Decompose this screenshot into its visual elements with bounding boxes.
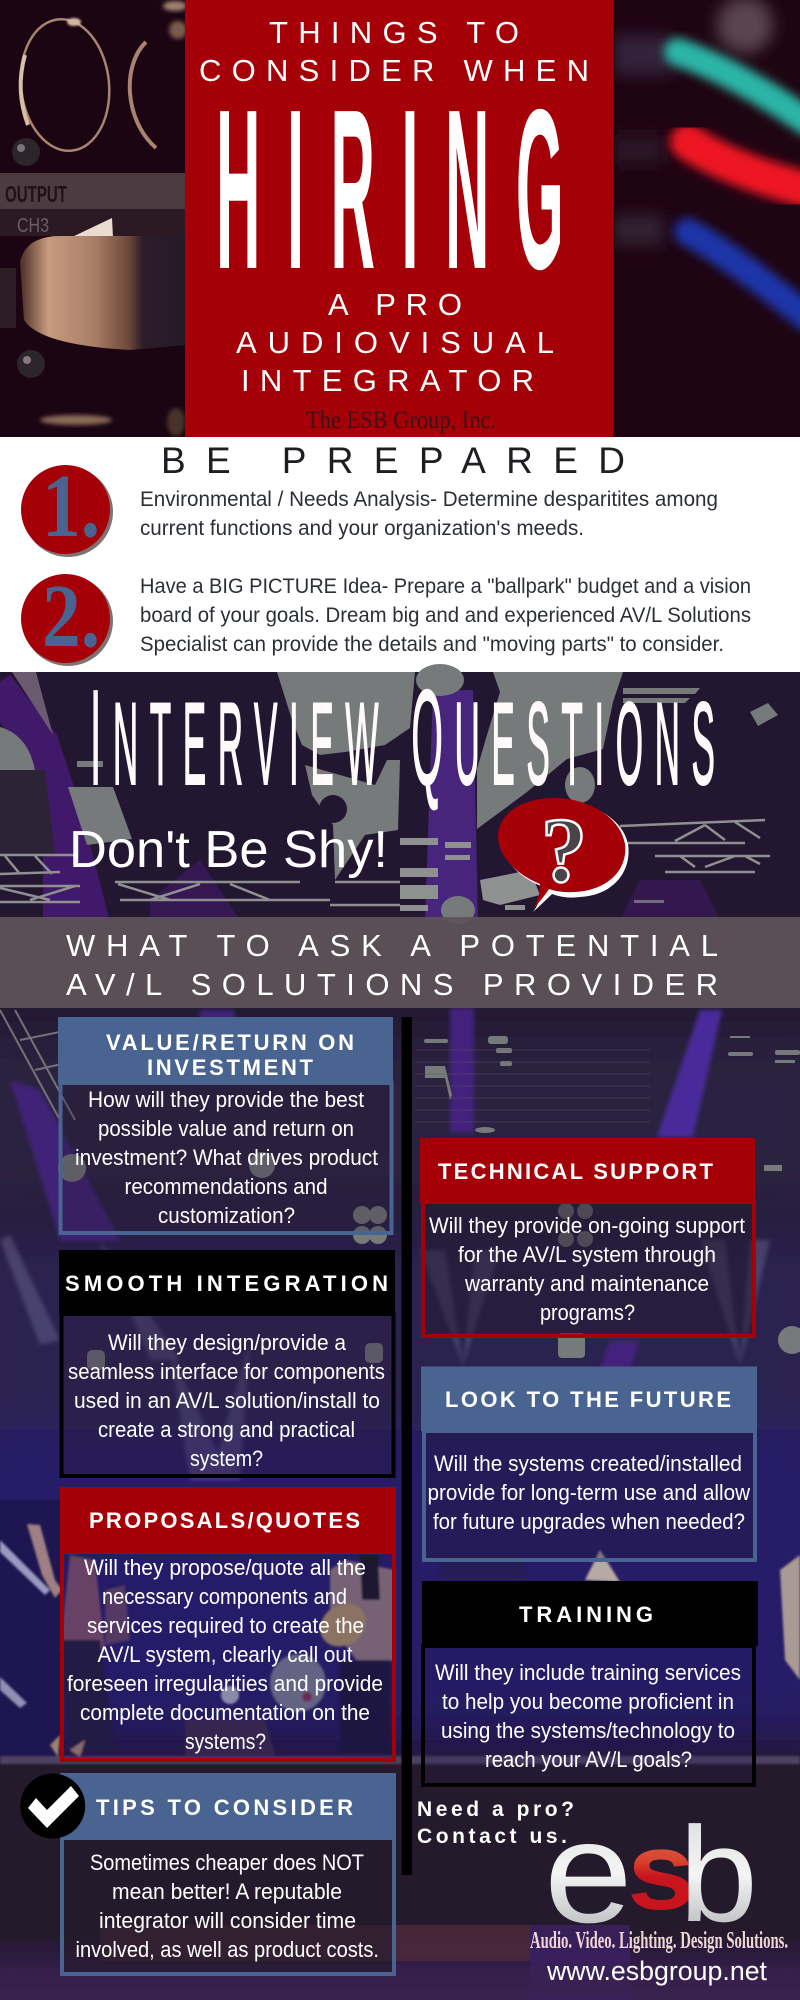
card heading: TECHNICAL SUPPORT — [438, 1159, 714, 1184]
card text — [68, 1330, 385, 1471]
banner line two: AV/L SOLUTIONS PROVIDER — [66, 967, 718, 1002]
card heading: SMOOTH INTEGRATION — [65, 1271, 388, 1296]
title word: hiring: HIRING — [216, 63, 590, 317]
icon: number two: 2. — [42, 567, 100, 666]
card: tips to consider — [20, 1773, 396, 1974]
card text: to help you become proficient in — [442, 1689, 734, 1714]
icon: question speech bubble — [498, 798, 629, 912]
photo: blurred coloured cables — [613, 0, 800, 437]
text: step two: board of your goals. Dream big and and experienced AV/L Solutions — [140, 604, 751, 627]
icon: number one — [21, 457, 113, 557]
card text: foreseen irregularities and provide — [67, 1671, 383, 1696]
card text — [67, 1555, 383, 1754]
card heading: PROPOSALS/QUOTES — [89, 1508, 360, 1533]
top stage: grey light shapes — [0, 664, 778, 924]
card text: investment? What drives product — [75, 1145, 378, 1170]
website: www.esbgroup.net — [546, 1956, 767, 1986]
card text — [429, 1213, 745, 1325]
light cones — [0, 1235, 770, 1480]
title line: audiovisual: AUDIOVISUAL — [236, 325, 554, 360]
card text: for the AV/L system through — [458, 1242, 716, 1267]
card text: Will they provide on-going support — [429, 1213, 745, 1238]
banner line one: WHAT TO ASK A POTENTIAL — [66, 928, 718, 963]
timeline divider bar — [402, 1017, 412, 1875]
text: step two: Specialist can provide the details and "moving parts" to consider. — [140, 633, 724, 656]
icon: check mark — [20, 1774, 85, 1838]
card text: Will they design/provide a — [108, 1330, 347, 1355]
card text: recommendations and — [124, 1174, 328, 1199]
top stage: truss — [0, 820, 770, 905]
banner: what to ask — [0, 917, 800, 1008]
photo: audio equipment: OUTPUT — [5, 181, 67, 207]
call to action: Contact us. — [417, 1825, 567, 1848]
card text: for future upgrades when needed? — [433, 1509, 745, 1534]
logo: esb — [544, 1792, 758, 1953]
card text: seamless interface for components — [68, 1359, 385, 1384]
card heading: LOOK TO THE FUTURE — [445, 1387, 731, 1412]
card text — [76, 1850, 379, 1962]
heading: be prepared: BE PREPARED — [161, 440, 625, 481]
icon: number two — [21, 567, 113, 666]
card heading: VALUE/RETURN ON — [106, 1030, 354, 1055]
heading: interview questions: INTERVIEW QUESTIONS — [90, 663, 727, 814]
card text: Will they propose/quote all the — [84, 1555, 366, 1580]
card: proposals / quotes — [60, 1487, 396, 1760]
heading: don't be shy: Don't Be Shy! — [69, 821, 388, 879]
card text: Sometimes cheaper does NOT — [90, 1850, 364, 1875]
card heading: TRAINING — [519, 1602, 653, 1627]
text: step one: current functions and your organization's meeds. — [140, 517, 584, 540]
logo: esb: b — [679, 1800, 758, 1950]
icon: number one: 1. — [42, 457, 100, 556]
card text: programs? — [540, 1300, 635, 1325]
card text: involved, as well as product costs. — [76, 1937, 379, 1962]
text: step one — [140, 488, 718, 540]
card text: system? — [190, 1446, 263, 1471]
title line: consider when: CONSIDER WHEN — [199, 53, 589, 88]
card text: mean better! A reputable — [112, 1879, 342, 1904]
card text: provide for long-term use and allow — [428, 1480, 750, 1505]
card heading — [106, 1030, 354, 1080]
panel: be prepared — [0, 437, 800, 672]
card text: reach your AV/L goals? — [485, 1747, 692, 1772]
card heading: TIPS TO CONSIDER — [96, 1795, 353, 1820]
card text: integrator will consider time — [99, 1908, 356, 1933]
card text: possible value and return on — [98, 1116, 354, 1141]
stage performers — [0, 1524, 800, 1764]
card text: necessary components and — [102, 1584, 347, 1609]
title line: things to: THINGS TO — [269, 15, 519, 50]
logo: esb: s — [627, 1809, 696, 1933]
call to action: Need a pro? — [417, 1798, 574, 1821]
card text: create a strong and practical — [98, 1417, 355, 1442]
card text: Will they include training services — [435, 1660, 741, 1685]
title line: integrator: INTEGRATOR — [241, 363, 534, 398]
logo: esb: e — [544, 1792, 633, 1953]
card heading: INVESTMENT — [147, 1055, 314, 1080]
card text: services required to create the — [87, 1613, 364, 1638]
card: look to the future — [421, 1366, 757, 1560]
card: value / return on investment — [58, 1017, 393, 1233]
card: technical support — [420, 1138, 755, 1336]
card: training — [422, 1581, 758, 1785]
card text: used in an AV/L solution/install to — [74, 1388, 380, 1413]
card text: customization? — [158, 1203, 295, 1228]
panel: title — [185, 0, 613, 437]
title line: a pro: A PRO — [328, 287, 462, 322]
card text: Will the systems created/installed — [434, 1451, 742, 1476]
card text: complete documentation on the — [80, 1700, 370, 1725]
top stage: purple beams — [0, 675, 720, 922]
photo: concert stage background — [0, 664, 800, 2000]
card text: warranty and maintenance — [464, 1271, 709, 1296]
photo: audio equipment — [0, 0, 187, 437]
text: step two: Have a BIG PICTURE Idea- Prepare a "ballpark" budget and a vision — [140, 575, 751, 598]
text: step two — [140, 575, 751, 656]
company name: The ESB Group, Inc. — [306, 407, 496, 434]
mid stage — [10, 1008, 722, 1370]
card text — [435, 1660, 741, 1772]
card text: systems? — [185, 1729, 266, 1754]
card text — [428, 1451, 750, 1534]
call to action — [417, 1798, 574, 1848]
card text: How will they provide the best — [88, 1087, 364, 1112]
card text — [75, 1087, 378, 1228]
card: smooth integration — [59, 1250, 395, 1476]
card text: AV/L system, clearly call out — [98, 1642, 352, 1667]
icon: question mark: ? — [541, 799, 587, 901]
photo: audio equipment: CH3 — [17, 215, 49, 237]
card text: using the systems/technology to — [441, 1718, 735, 1743]
text: step one: Environmental / Needs Analysis- Determine desparitites among — [140, 488, 718, 511]
